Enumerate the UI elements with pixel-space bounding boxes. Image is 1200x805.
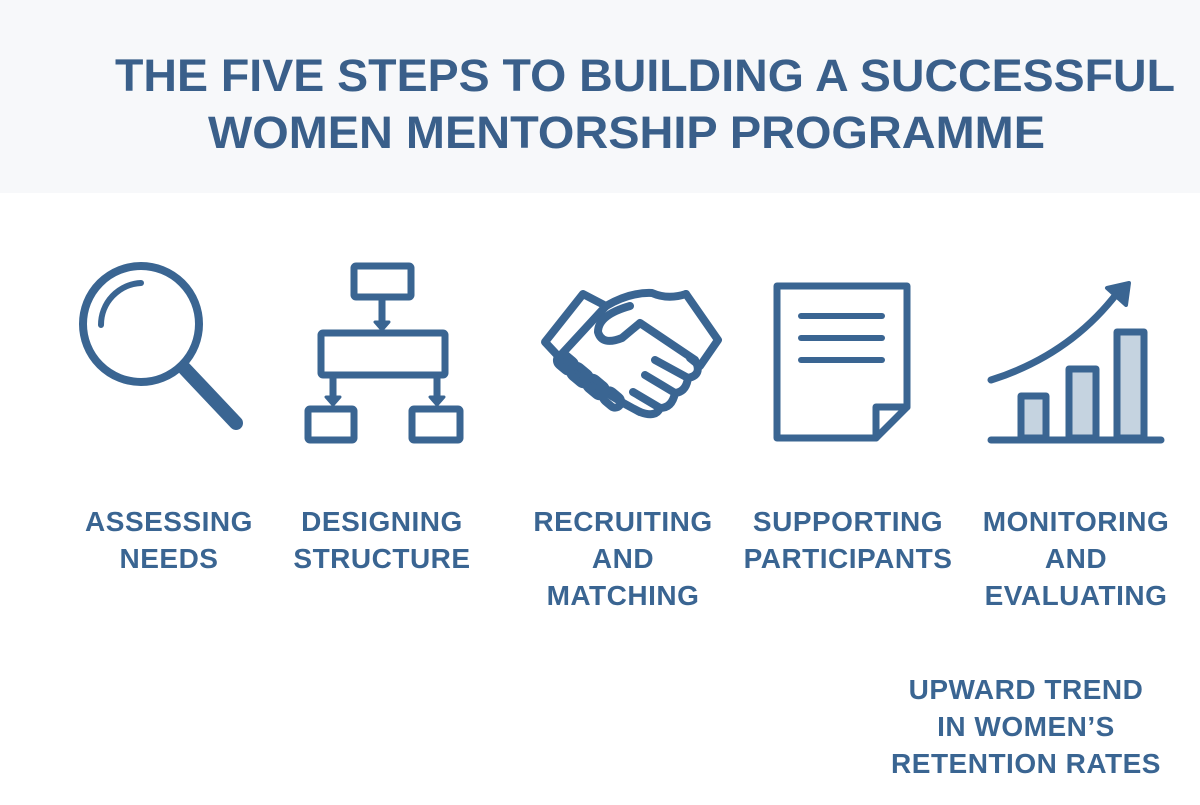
step labels: DESIGNING <box>301 506 463 537</box>
step labels: PARTICIPANTS <box>744 543 952 574</box>
step labels: AND <box>592 543 654 574</box>
step labels: AND <box>1045 543 1107 574</box>
step labels: NEEDS <box>120 543 218 574</box>
title <box>115 50 1175 158</box>
step labels: RECRUITING <box>533 506 713 537</box>
icon: document <box>777 286 907 438</box>
icon: handshake <box>545 293 718 414</box>
icon: bar chart with rising arrow <box>991 283 1161 440</box>
callout: upward trend: IN WOMEN’S <box>937 711 1115 742</box>
header band <box>0 0 1200 193</box>
step labels: EVALUATING <box>985 580 1167 611</box>
step labels: MATCHING <box>547 580 699 611</box>
step labels <box>85 506 1169 611</box>
callout: upward trend: RETENTION RATES <box>891 748 1161 779</box>
title: WOMEN MENTORSHIP PROGRAMME <box>208 107 1045 158</box>
step labels: STRUCTURE <box>293 543 471 574</box>
icon: flowchart <box>308 266 460 440</box>
step labels: SUPPORTING <box>753 506 943 537</box>
title: THE FIVE STEPS TO BUILDING A SUCCESSFUL <box>115 50 1175 101</box>
icon: magnifying glass <box>83 266 236 423</box>
callout: upward trend <box>891 674 1161 779</box>
callout: upward trend: UPWARD TREND <box>909 674 1143 705</box>
step labels: ASSESSING <box>85 506 253 537</box>
step labels: MONITORING <box>983 506 1169 537</box>
